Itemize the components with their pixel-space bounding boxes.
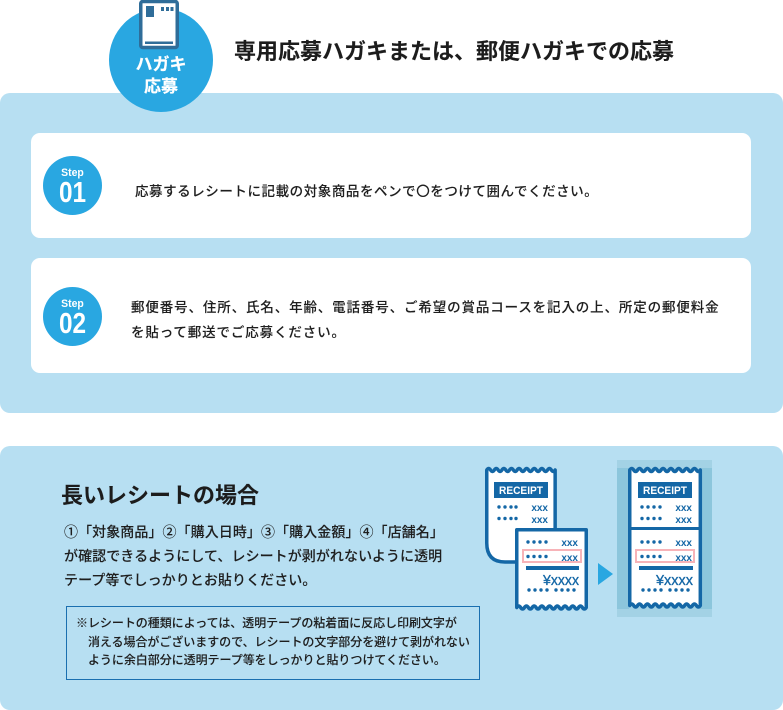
icon: long receipt front: ¥xxxx (542, 572, 579, 589)
icon: long receipt back: RECEIPT (499, 485, 543, 497)
panel: step 2 (31, 258, 751, 373)
text: step 2: を貼って郵送でご応募ください。 (131, 325, 346, 340)
text: step 2: 郵便番号、住所、氏名、年齢、電話番号、ご希望の賞品コースを記入の上、所定の郵便料金 (131, 300, 720, 315)
icon: postcard badge (109, 0, 213, 112)
step label: Step (61, 298, 84, 310)
title: 専用応募ハガキまたは、郵便ハガキでの応募 (234, 39, 674, 64)
heading: long receipts: 長いレシートの場合 (61, 483, 259, 508)
icon: long receipt back (487, 468, 555, 562)
step number: 02 (59, 308, 86, 340)
note text (76, 616, 470, 667)
panel: long receipts (0, 446, 783, 710)
icon: long receipt front: xxx (561, 538, 578, 549)
icon: postcard (139, 0, 179, 50)
note text: ように余白部分に透明テープ等をしっかりと貼りつけてください。 (88, 653, 446, 667)
icon: long receipt front: xxx (561, 553, 578, 564)
text: instructions (64, 524, 444, 588)
icon: taped receipt: xxx (675, 515, 692, 526)
note text: ※レシートの種類によっては、透明テープの粘着面に反応し印刷文字が (76, 616, 457, 630)
text: instructions: ①「対象商品」②「購入日時」③「購入金額」④「店舗名」 (64, 524, 444, 540)
callout: note (66, 606, 480, 680)
step label: Step (61, 167, 84, 179)
badge: step 1 (43, 156, 102, 215)
panel: steps background (0, 93, 783, 413)
text: instructions: テープ等でしっかりとお貼りください。 (64, 572, 316, 588)
icon: taped receipt (617, 460, 712, 617)
text: instructions: が確認できるようにして、レシートが剥がれないように透明 (64, 548, 442, 564)
panel: step 1 (31, 133, 751, 238)
badge label: ハガキ (136, 55, 186, 74)
icon: long receipt front (517, 530, 586, 609)
icon: long receipt back: xxx (531, 503, 548, 514)
icon: taped receipt: ¥xxxx (655, 572, 693, 589)
badge circle (109, 8, 213, 112)
badge: step 2 (43, 287, 102, 346)
arrow (598, 563, 613, 585)
badge label: 応募 (144, 77, 178, 96)
note text: 消える場合がございますので、レシートの文字部分を避けて剥がれない (88, 634, 470, 648)
icon: taped receipt: xxx (675, 538, 692, 549)
step number: 01 (59, 177, 86, 209)
icon: taped receipt: xxx (675, 503, 692, 514)
text: step 2 (131, 300, 720, 340)
text: step 1: 応募するレシートに記載の対象商品をペンで〇をつけて囲んでください。 (135, 184, 598, 199)
badge label (136, 55, 186, 96)
icon: taped receipt: xxx (675, 553, 692, 564)
icon: long receipt back: xxx (531, 515, 548, 526)
icon: taped receipt: RECEIPT (643, 485, 687, 497)
